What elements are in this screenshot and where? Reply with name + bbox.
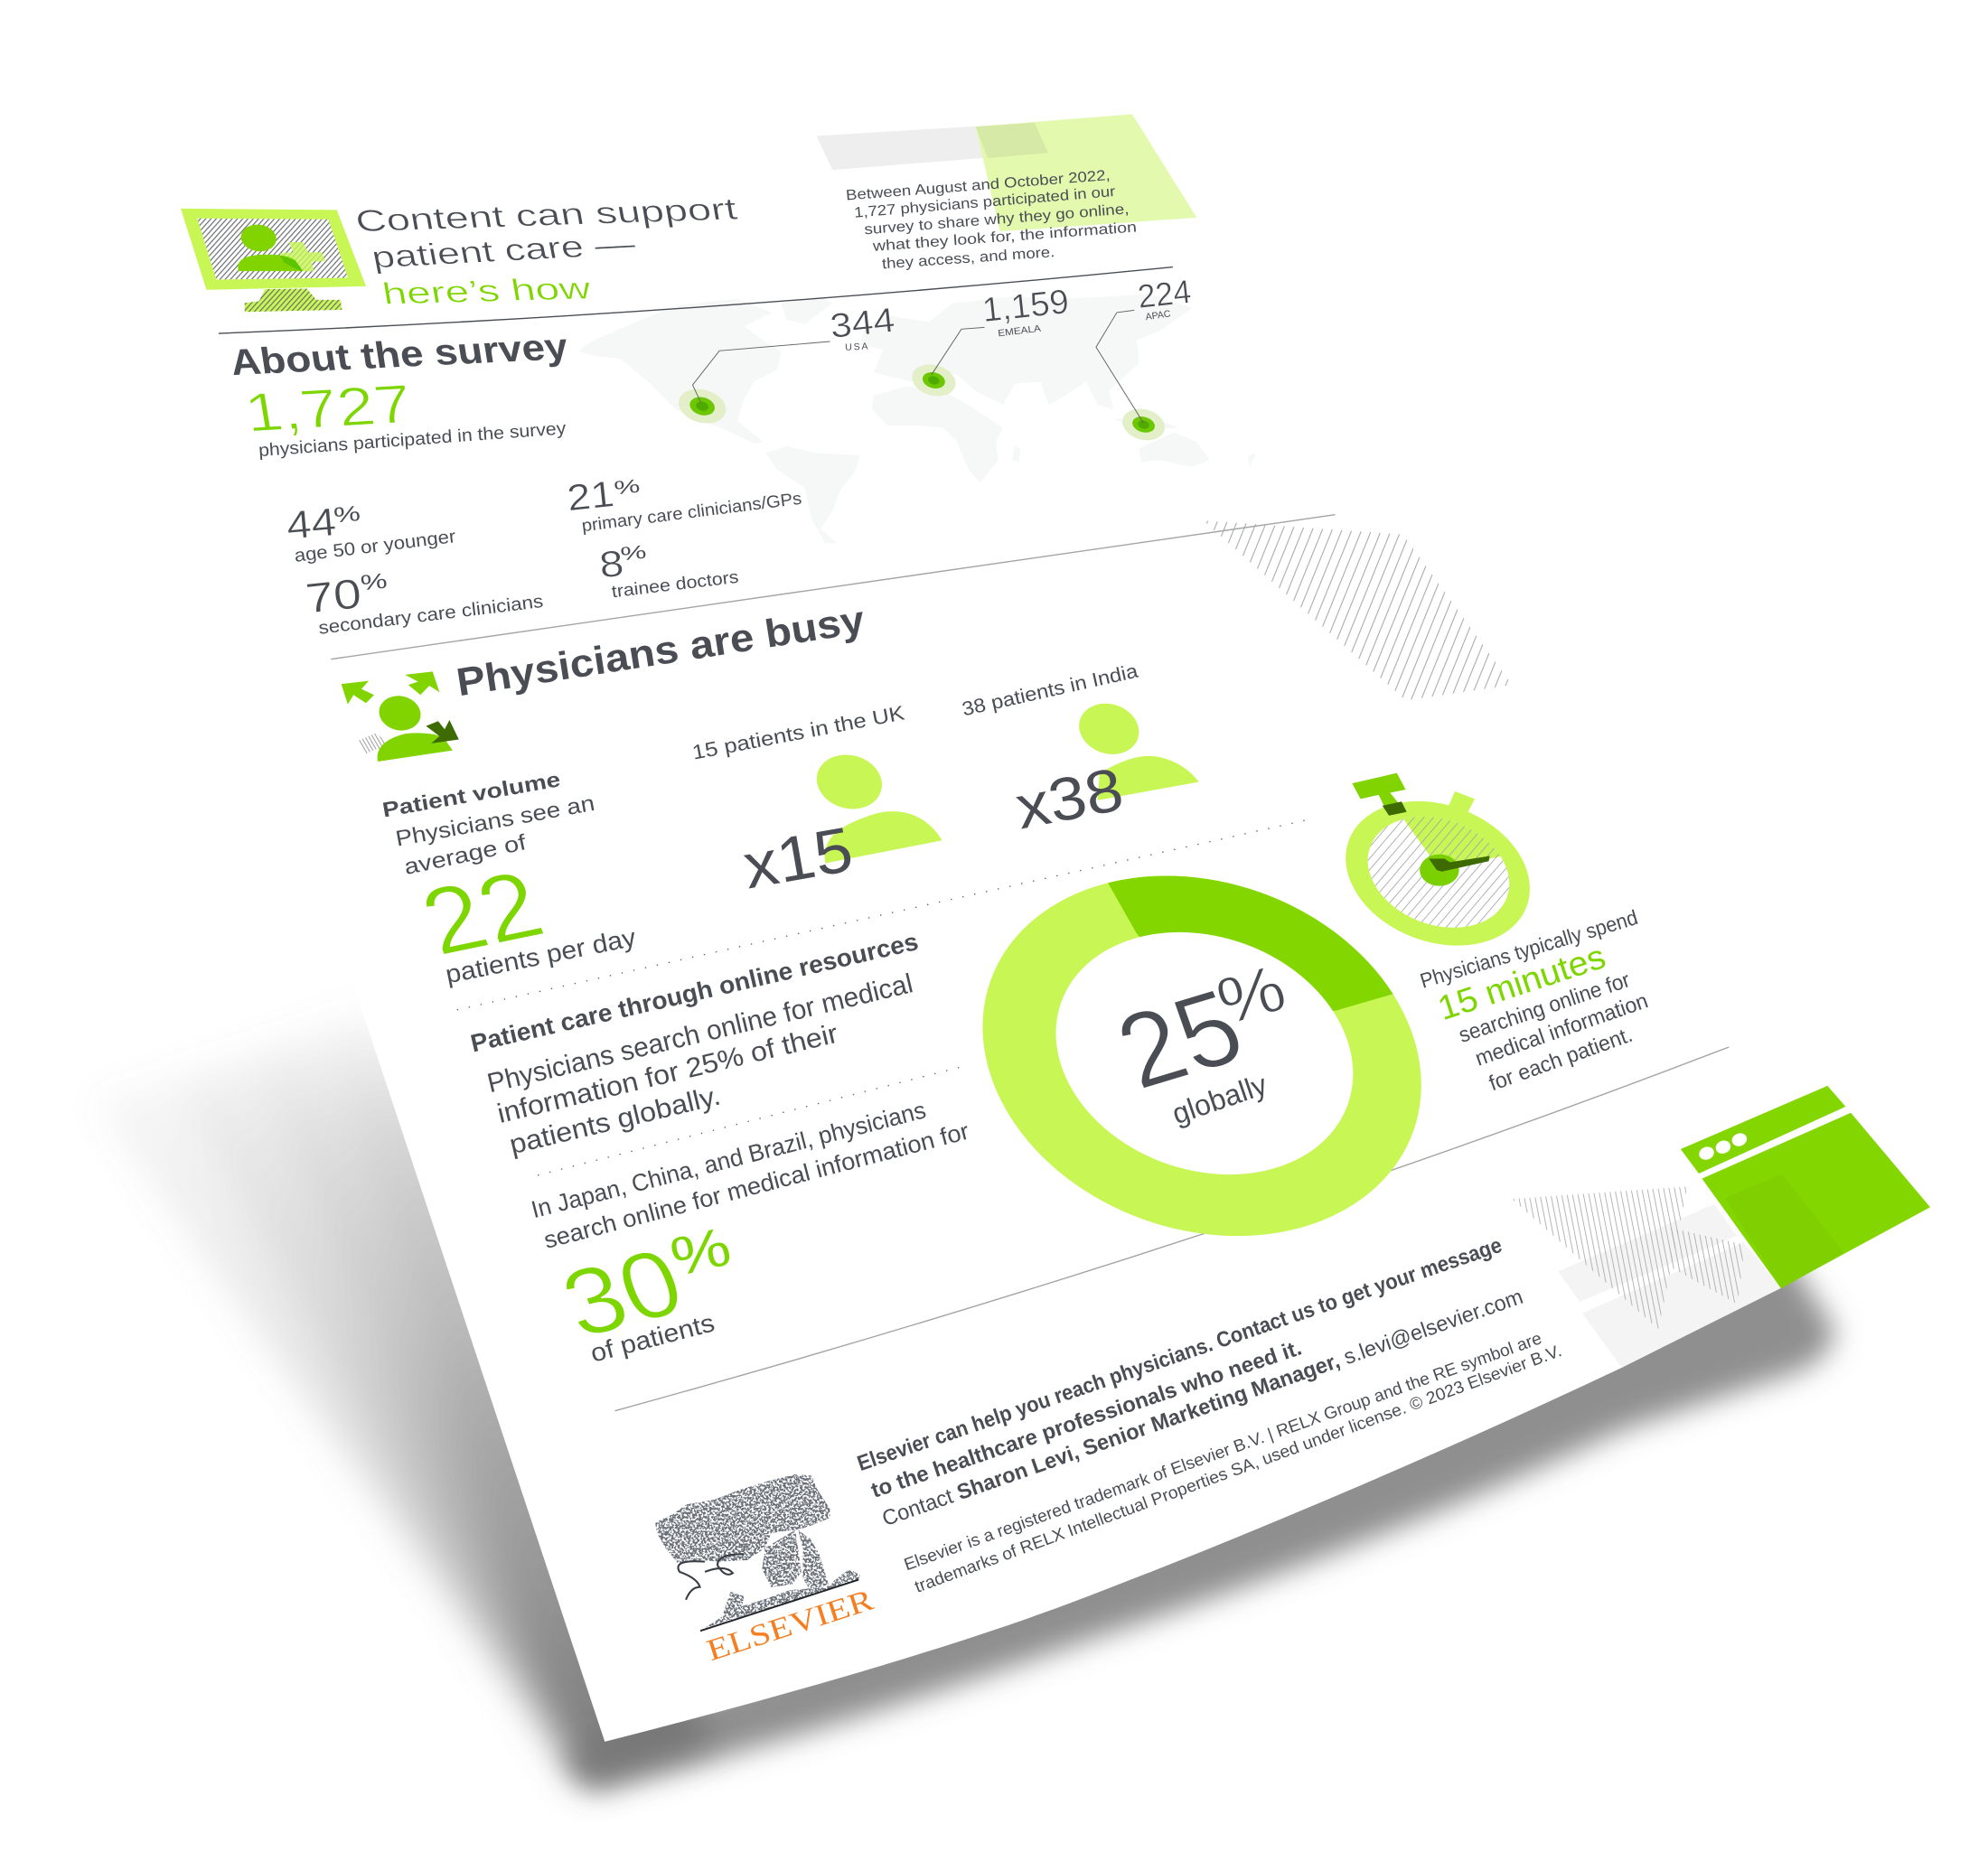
stat: 70%: % <box>360 569 389 595</box>
intro paragraph: 1,727 physicians participated in our <box>854 183 1117 221</box>
logo: Elsevier tree <box>655 1474 860 1631</box>
call to action text: Elsevier can help you reach physicians. Contact us to get your message <box>854 1233 1505 1476</box>
title: patient care — <box>369 227 639 275</box>
stat: 44%: 44 <box>285 500 338 548</box>
donut chart: 25% globally: 25 <box>1101 967 1260 1112</box>
stat: 30% of patients: 30 <box>548 1227 697 1358</box>
stat: 22 patients per day: patients per day <box>443 923 638 988</box>
online resources text: patients globally. <box>507 1081 724 1160</box>
stat: 15 patients in the UK <box>690 701 942 902</box>
stat: 30% of patients <box>548 1215 736 1368</box>
stat: 21%: primary care clinicians/GPs <box>581 490 802 536</box>
stat: 1,727 physicians <box>240 372 567 461</box>
patient volume text <box>380 767 596 880</box>
decorative shapes bottom right <box>1512 1186 1781 1368</box>
stat: 15 patients in the UK: x15 <box>738 813 858 902</box>
stat: 8%: 8 <box>597 542 625 585</box>
stat: 15 minutes: 15 minutes <box>1433 938 1610 1028</box>
icon: monitor with person <box>181 209 366 312</box>
stat: 70%: secondary care clinicians <box>317 592 544 639</box>
patient volume text: Physicians see an <box>394 791 596 852</box>
intro paragraph: Between August and October 2022, <box>845 167 1111 203</box>
intro paragraph: what they look for, the information <box>871 219 1137 255</box>
map marker: EMEALA: EMEALA <box>998 323 1041 339</box>
map marker: APAC <box>1096 273 1193 444</box>
map marker: APAC: 224 <box>1136 273 1193 315</box>
map marker: EMEALA: 1,159 <box>980 283 1071 330</box>
intro paragraph <box>845 167 1137 272</box>
stat: 8%: % <box>619 542 647 565</box>
title: Content can support <box>352 192 740 239</box>
stat: 1,727 physicians: physicians participated in the survey <box>258 418 567 461</box>
Japan China Brazil text: search online for medical information for <box>541 1118 972 1254</box>
donut chart: 25% globally <box>982 876 1421 1236</box>
decorative corner shapes top right <box>817 114 1196 231</box>
stat: 21% <box>565 472 802 536</box>
map marker: EMEALA <box>908 283 1071 401</box>
stat: 1,727 physicians: 1,727 <box>240 372 417 444</box>
logo: Elsevier wordmark: ELSEVIER <box>703 1583 877 1668</box>
donut chart: 25% globally: % <box>1209 950 1294 1040</box>
online resources text: Physicians search online for medical <box>484 968 915 1099</box>
stat: 38 patients in India <box>960 659 1199 842</box>
stat: 70% <box>304 569 544 639</box>
trademark text: Elsevier is a registered trademark of Elsevier B.V. | RELX Group and the RE symbol are <box>902 1329 1544 1575</box>
online resources text <box>468 927 921 1160</box>
stat: 15 minutes: medical information <box>1472 988 1651 1071</box>
intro paragraph: survey to share why they go online, <box>864 201 1130 238</box>
page shadow <box>95 1001 1836 1792</box>
stat: 30% of patients: % <box>664 1215 736 1288</box>
call to action text: to the healthcare professionals who need it. <box>868 1335 1305 1503</box>
trademark text: trademarks of RELX Intellectual Properties SA, used under license. © 2023 Elsevier B.V. <box>913 1342 1564 1597</box>
Japan China Brazil text: In Japan, China, and Brazil, physicians <box>529 1096 929 1223</box>
online resources text: Patient care through online resources <box>468 927 921 1057</box>
title <box>352 192 740 312</box>
call to action text: Contact Sharon Levi, Senior Marketing Manager, s.levi@elsevier.com <box>879 1285 1526 1531</box>
map marker: USA: 344 <box>829 302 896 346</box>
icon: browser window <box>1681 1086 1930 1288</box>
stat: 44% <box>285 500 457 566</box>
intro paragraph: they access, and more. <box>881 244 1055 272</box>
donut chart: 25% globally: globally <box>1168 1068 1271 1130</box>
stat: 38 patients in India: x38 <box>1010 755 1129 842</box>
stat: 15 minutes: Physicians typically spend <box>1417 905 1640 993</box>
patient volume text: Patient volume <box>380 767 562 822</box>
map marker: USA: USA <box>845 341 868 353</box>
stat: 15 minutes: searching online for <box>1456 968 1633 1048</box>
stat: 30% of patients: of patients <box>587 1308 717 1368</box>
stat: 8%: trainee doctors <box>611 568 740 602</box>
decorative hatch top right <box>1204 520 1512 700</box>
stat: 70%: 70 <box>304 569 363 622</box>
map marker: APAC: APAC <box>1145 308 1172 323</box>
stat: 44%: % <box>333 501 361 528</box>
icon: person with arrows <box>342 671 459 762</box>
stat: 22 patients per day <box>408 850 638 988</box>
online resources text: information for 25% of their <box>494 1019 841 1129</box>
heading: About the survey: About the survey <box>228 325 571 383</box>
world map <box>578 295 1257 543</box>
heading: Physicians are busy: Physicians are busy <box>454 598 867 705</box>
icon: stopwatch <box>1346 773 1530 946</box>
stat: 15 minutes: for each patient. <box>1486 1023 1636 1096</box>
stat: 15 minutes <box>1417 905 1651 1096</box>
stat: 22 patients per day: 22 <box>408 850 557 976</box>
stat: 15 patients in the UK: 15 patients in the UK <box>690 701 906 764</box>
stat: 38 patients in India: 38 patients in India <box>960 659 1140 720</box>
stat: 21%: 21 <box>565 472 616 519</box>
map marker: USA <box>675 302 896 428</box>
stat: 8% <box>597 542 740 602</box>
stat: 21%: % <box>613 476 641 500</box>
title: here’s how <box>380 271 594 312</box>
stat: 44%: age 50 or younger <box>294 527 457 566</box>
patient volume text: average of <box>402 830 529 880</box>
